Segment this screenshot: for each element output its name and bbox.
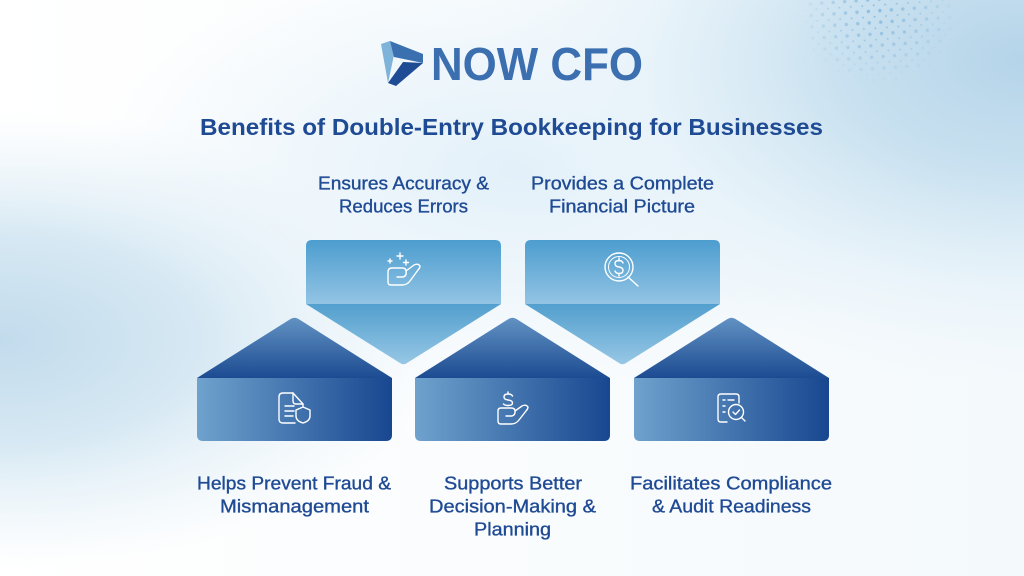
label: decision making: Supports Better	[444, 474, 582, 494]
label: ensures accuracy	[318, 174, 489, 216]
label: fraud prevention	[197, 474, 391, 516]
label: compliance: Facilitates Compliance	[630, 474, 832, 494]
logo wordmark: NOW CFO	[431, 38, 643, 90]
label: decision making: Decision-Making &	[429, 496, 596, 516]
panel: financial picture	[525, 240, 720, 364]
icon: hand with dollar	[498, 392, 528, 424]
label: fraud prevention: Helps Prevent Fraud &	[197, 474, 391, 494]
logo: NOW CFO	[381, 38, 643, 90]
panel: compliance	[634, 318, 829, 441]
label: ensures accuracy: Reduces Errors	[339, 196, 468, 216]
halftone dot pattern	[809, 0, 948, 76]
label: compliance: & Audit Readiness	[652, 496, 811, 516]
label: decision making	[429, 474, 596, 540]
panel: fraud prevention	[197, 318, 392, 441]
label: compliance	[630, 474, 832, 516]
label: ensures accuracy: Ensures Accuracy &	[318, 174, 489, 194]
icon: document with shield	[279, 393, 310, 423]
label: decision making: Planning	[474, 520, 551, 540]
panel: ensures accuracy	[306, 240, 501, 364]
icon: magnifier with dollar	[605, 253, 638, 286]
label: fraud prevention: Mismanagement	[220, 496, 369, 516]
title: Benefits of Double-Entry Bookkeeping for Businesses	[200, 114, 823, 140]
icon: logo mark	[381, 41, 423, 86]
label: complete financial picture: Financial Picture	[549, 196, 695, 216]
icon: hand with sparkles	[388, 253, 420, 285]
panel: decision making	[415, 318, 610, 441]
label: complete financial picture	[531, 174, 714, 216]
label: complete financial picture: Provides a Complete	[531, 174, 714, 194]
icon: checklist with magnifier	[718, 394, 745, 422]
